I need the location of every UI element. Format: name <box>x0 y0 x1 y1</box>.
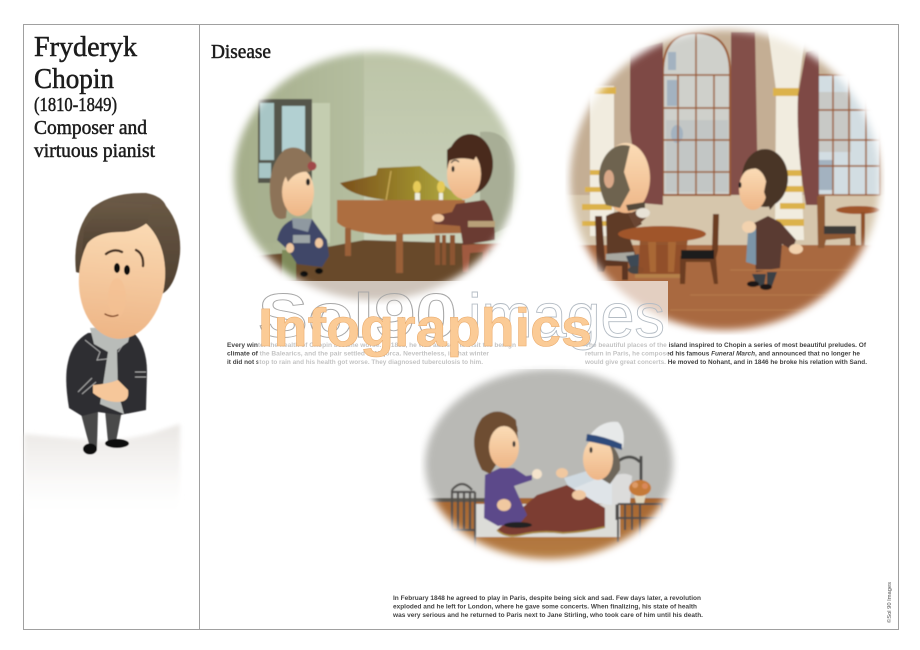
left curtain <box>630 42 663 205</box>
centre curtain <box>731 32 758 195</box>
illustration: Chopin standing portrait <box>24 193 180 522</box>
title block: Chopin <box>34 64 114 95</box>
floor shadow <box>24 424 180 522</box>
title block: Composer and <box>34 117 147 139</box>
watermark: Sol90 images: images <box>468 282 665 351</box>
watermark: Sol90 images: Sol90 <box>258 282 457 351</box>
paragraph: preludes and Funeral March: The beautiful places of the island inspired to Chopin a series of most beautiful preludes. Of <box>585 342 867 349</box>
sidebar divider <box>198 24 200 630</box>
flower vase <box>629 480 651 503</box>
paragraph: winter in Majorca: it did not stop to rain and his health got worse. They diagnosed tuberculosis to him. <box>227 359 483 366</box>
wooden floor <box>259 239 495 304</box>
right wall <box>364 45 524 255</box>
mouth <box>105 314 118 316</box>
right pillar <box>768 30 806 240</box>
standing Chopin <box>738 149 803 290</box>
wall <box>420 365 680 500</box>
watermark panel <box>258 281 668 369</box>
headboard <box>617 456 641 520</box>
seated gentleman <box>595 143 650 280</box>
Chopin shadow on wall <box>480 132 515 240</box>
mattress <box>475 504 620 537</box>
title block: virtuous pianist <box>34 140 155 162</box>
paragraph: last concert and death <box>392 595 703 619</box>
jacket trim <box>78 334 146 394</box>
illustration: Chopin ill in bed with Jane Stirling <box>420 365 680 568</box>
floor <box>420 498 680 568</box>
shoes <box>83 444 97 454</box>
piano <box>337 166 468 273</box>
patient Chopin <box>556 422 624 505</box>
woman caregiver <box>474 411 542 528</box>
title block: (1810-1849) <box>34 94 117 116</box>
Chopin at piano <box>432 134 495 245</box>
watermark: Sol90 images <box>258 282 665 351</box>
window <box>258 99 330 243</box>
paragraph: winter in Majorca: Every winter the health of Chopin became worse. In 1838, he was advised to visit the benign <box>227 342 516 349</box>
background chair and table <box>817 196 880 248</box>
paragraph: winter in Majorca <box>227 342 516 366</box>
illustration: Chopin at piano with Sand <box>225 45 525 305</box>
nose <box>108 278 126 318</box>
watermark: Infographics: Infographics <box>258 298 592 358</box>
eyes <box>114 263 120 273</box>
hair front <box>82 202 152 254</box>
right chair <box>680 214 719 284</box>
head <box>74 211 170 343</box>
jacket <box>66 331 147 416</box>
right window <box>818 75 880 195</box>
arched window <box>663 33 730 195</box>
left wall <box>225 45 364 255</box>
seated woman <box>270 148 329 280</box>
piano stool <box>462 243 502 272</box>
footboard <box>452 484 475 556</box>
paragraph: preludes and Funeral March: return in Paris, he composed his famous Funeral March, and announced that no longer he <box>585 350 860 358</box>
credit: ©Sol 90 Images <box>886 582 893 623</box>
title block: Fryderyk <box>34 32 137 63</box>
paragraph: last concert and death: In February 1848 he agreed to play in Paris, despite being sick and sad. Few days later, a revolution <box>393 595 701 602</box>
blanket <box>497 485 605 536</box>
legs <box>80 410 122 448</box>
wall <box>566 26 884 196</box>
paragraph: preludes and Funeral March <box>584 342 867 366</box>
hand <box>93 380 128 402</box>
eyebrows <box>106 250 143 266</box>
paragraph: winter in Majorca: climate of the Balearics, and the pair settled in Majorca. Nevertheless, in that winter <box>227 350 489 358</box>
illustration: Chopin in a cafe with gentleman <box>565 25 885 335</box>
hair <box>75 193 180 295</box>
paragraph: preludes and Funeral March: would give great concerts. He moved to Nohant, and in 1846 he broke his relation with Sand. <box>584 359 867 366</box>
title block <box>34 32 155 162</box>
baseboard <box>425 498 495 502</box>
left pillar <box>582 86 616 236</box>
right curtain <box>798 48 819 205</box>
heading: Disease: Disease <box>211 41 271 63</box>
nightstand <box>618 504 663 545</box>
faint floor boards <box>671 268 842 310</box>
pillow <box>611 473 632 506</box>
lower wall <box>565 195 885 247</box>
cravat <box>90 326 132 414</box>
round table <box>618 226 706 278</box>
wooden floor <box>565 245 885 335</box>
paragraph: last concert and death: was very serious and he returned to Paris next to Jane Stirling, who took care of him until his death. <box>392 612 703 619</box>
paragraph: last concert and death: exploded and he left for London, where he gave some concerts. When finalizing, his state of health <box>393 604 697 610</box>
